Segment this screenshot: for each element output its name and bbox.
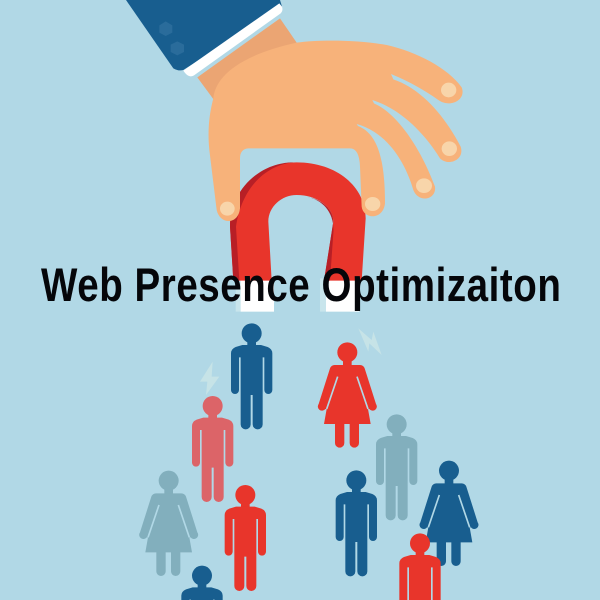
- person: blue woman: [419, 461, 478, 566]
- hand: [209, 41, 463, 221]
- wrist: [197, 18, 297, 100]
- crowd of people: [139, 323, 478, 600]
- lightning bolt right: [358, 328, 382, 355]
- shirt cuff: [183, 3, 282, 76]
- person: blue man top: [231, 323, 272, 429]
- person: blue man bottom: [181, 566, 223, 600]
- illustration: hand holding magnet: [126, 0, 463, 312]
- sleeve buttons: [159, 21, 184, 55]
- title: Web Presence Optimizaiton: [41, 259, 561, 312]
- person: grey man: [376, 414, 417, 520]
- person: grey woman: [139, 471, 198, 576]
- magnet white tips: [236, 278, 359, 312]
- fingernails: [220, 83, 457, 216]
- magnet: [230, 162, 366, 312]
- magnet dark shading: [230, 162, 333, 281]
- person: red woman: [318, 342, 377, 448]
- person: pink man: [192, 396, 233, 502]
- person: blue man right: [336, 470, 377, 576]
- lightning bolt left: [200, 362, 219, 395]
- person: red man left: [225, 485, 266, 591]
- magnet red body: [230, 162, 366, 281]
- person: red man bottom: [399, 533, 441, 600]
- jacket sleeve: [126, 0, 282, 70]
